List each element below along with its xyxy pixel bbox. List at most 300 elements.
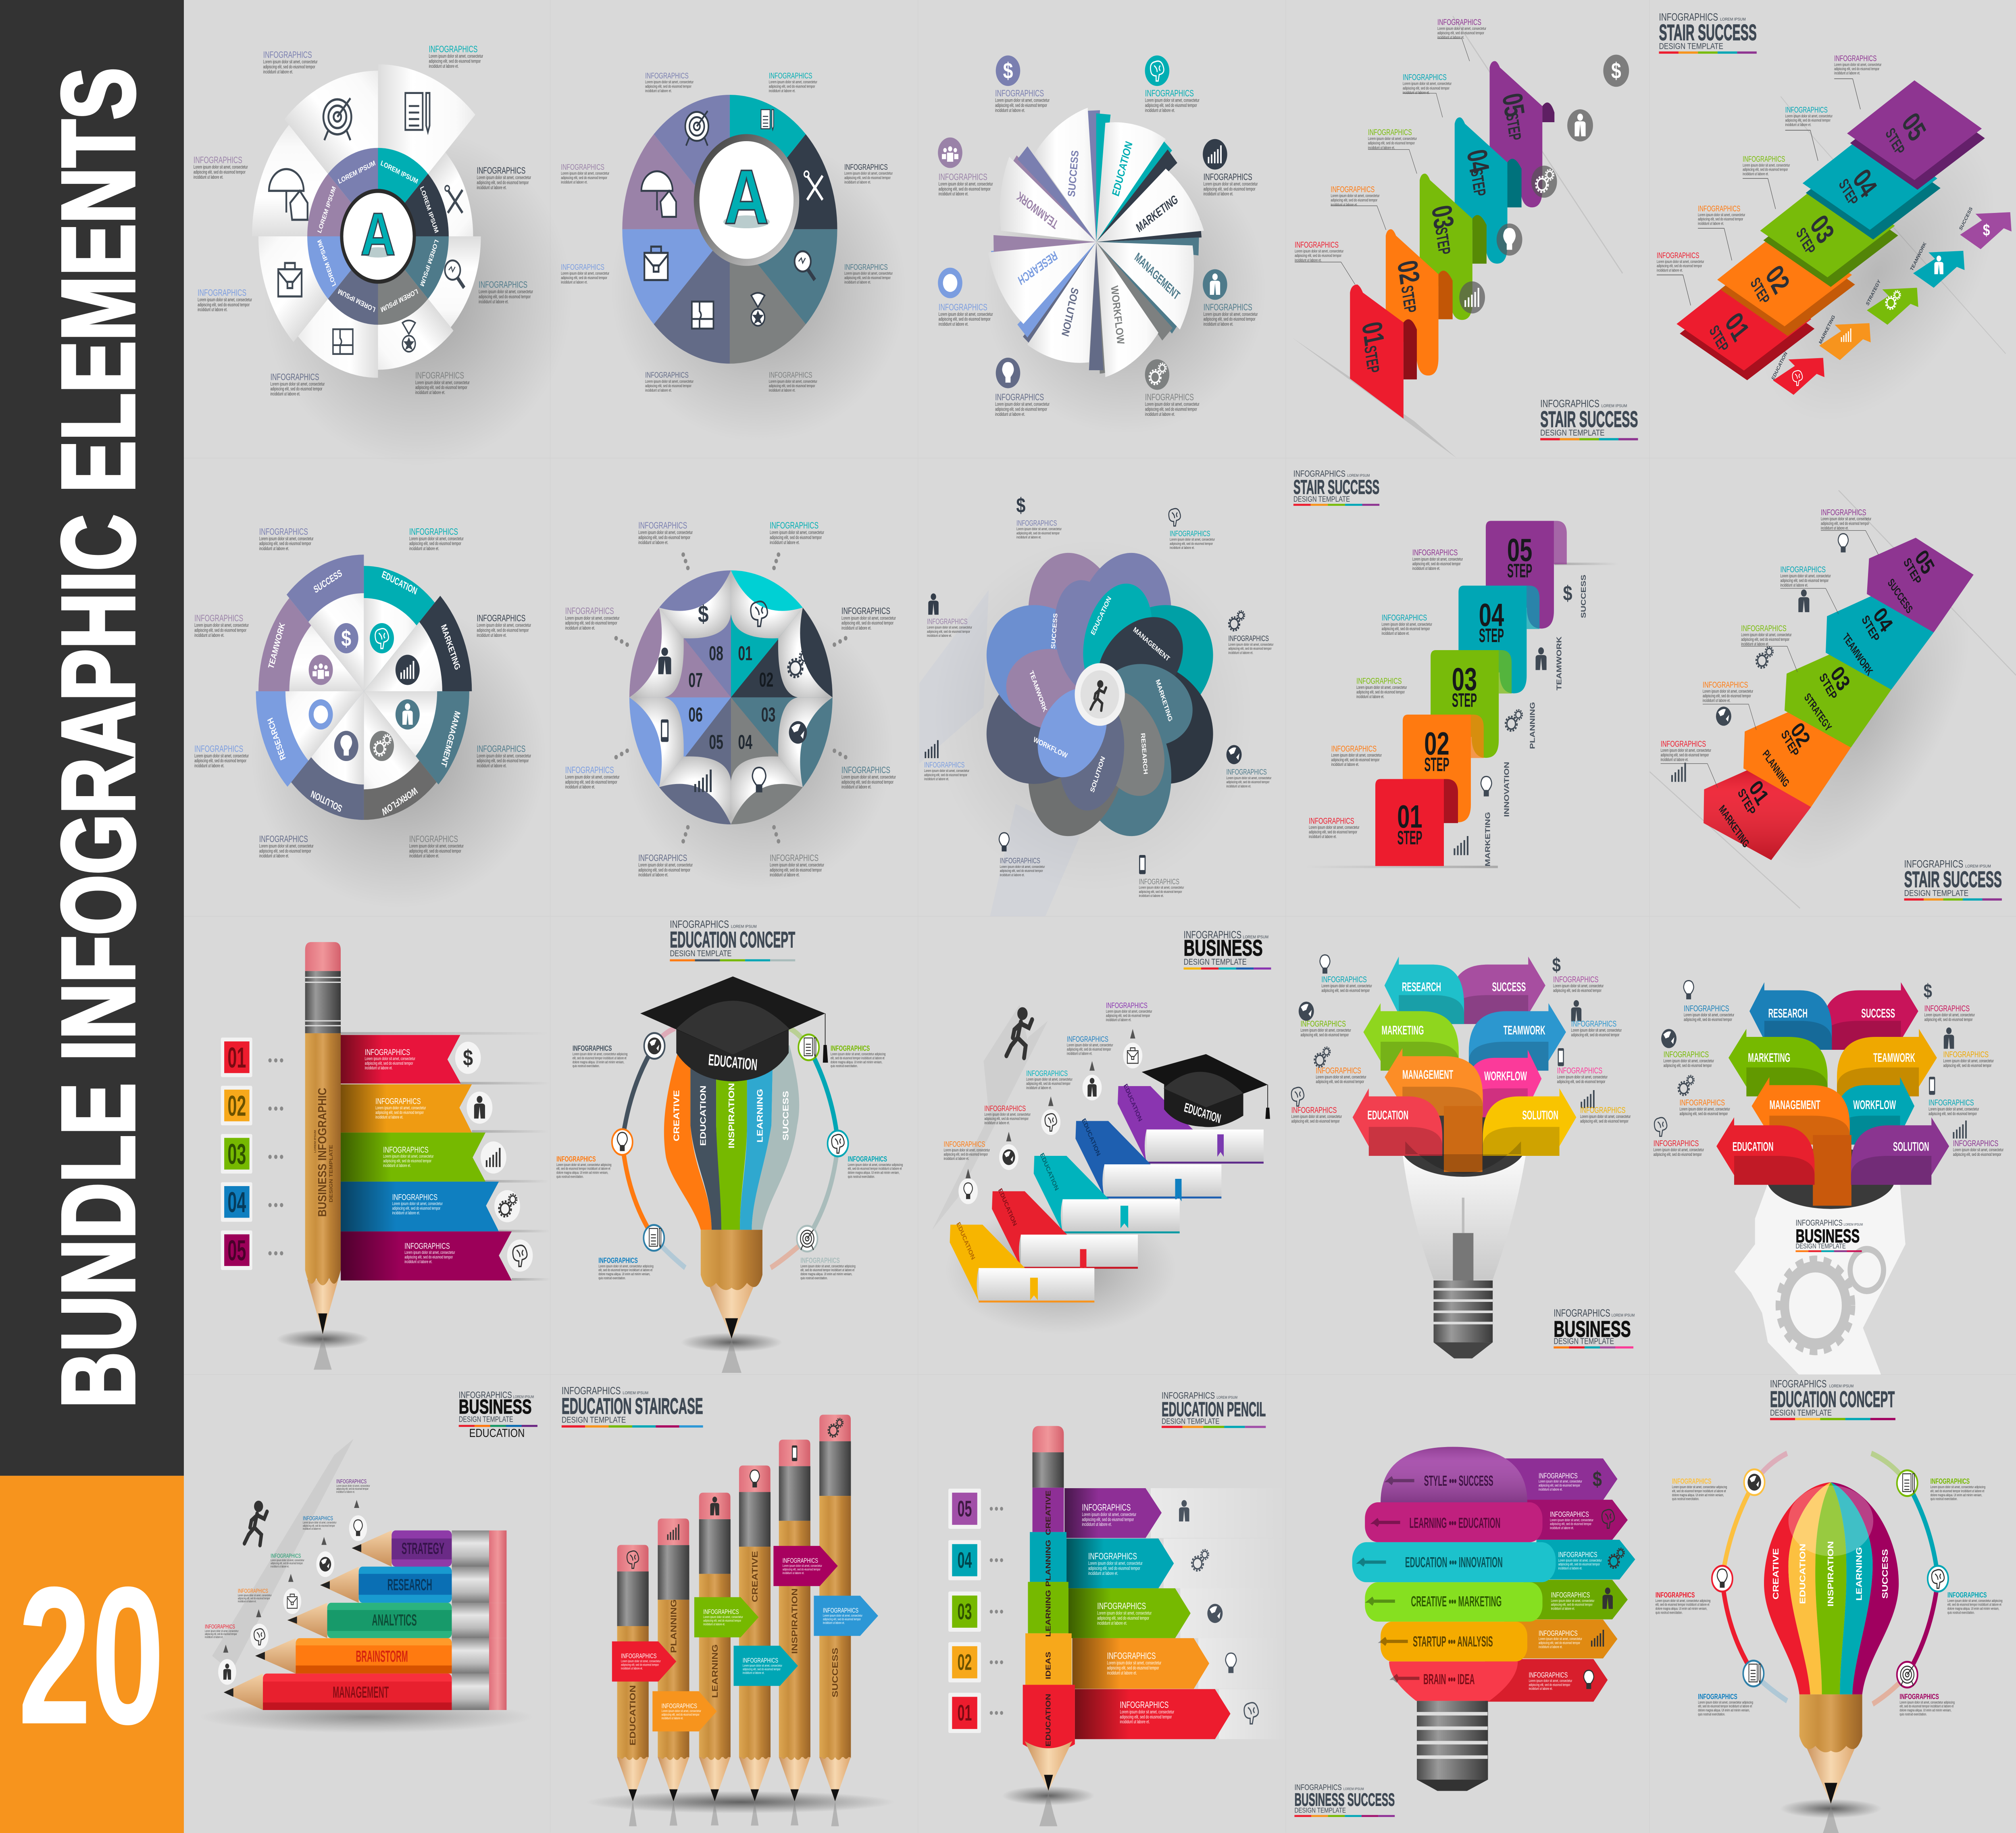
text block slate: adipiscing elit, sed do eiusmod tempor [995,407,1048,412]
fan labels: RESEARCH [1016,248,1059,287]
text block teal [1382,613,1432,636]
flag teal: INFOGRAPHICS [743,1657,778,1664]
text block orange: Lorem ipsum dolor sit amet, consectetur adipiscing [556,1163,612,1167]
heading: business education: LOREM IPSUM [513,1395,534,1399]
text block dark [844,162,893,184]
text block teal: Lorem ipsum dolor sit amet, consectetur [1170,537,1215,542]
text block green: Lorem ipsum dolor sit amet, consectetur adipiscing [1931,1485,1985,1489]
step numbers: 04 [1847,163,1883,204]
heading: education concept: EDUCATION CONCEPT [670,927,795,952]
heading: business education: DESIGN TEMPLATE [459,1415,513,1424]
banner text 1: adipiscing elit, sed do eiusmod tempor [365,1061,413,1066]
text block blue: incididunt ut labore et. [303,1528,321,1531]
text block slate: adipiscing elit, sed do eiusmod tempor [638,867,691,873]
tag text teal [1558,1551,1602,1570]
text block indigo: adipiscing elit, sed do eiusmod tempor [638,535,691,540]
text block orange: Lorem ipsum dolor sit amet, consectetur [944,1147,990,1152]
text block dark: incididunt ut labore et. [844,180,871,184]
text block blue [565,765,620,790]
text block steel: INFOGRAPHICS [477,744,525,754]
text block blue [1698,1693,1753,1716]
text block red: adipiscing elit, sed do eiusmod tempor [1291,1119,1340,1124]
text block purple: INFOGRAPHICS [939,172,987,182]
number tiles: 03 [958,1599,972,1624]
banner text green: adipiscing elit, sed do eiusmod tempor [1097,1616,1150,1621]
banners [341,1035,512,1280]
step numbers: STEP [1779,727,1801,759]
bundle count: 20 [18,1546,165,1765]
heading: stair success: STAIR SUCCESS [1659,20,1757,45]
text block teal: INFOGRAPHICS [1929,1097,1974,1107]
heading: stair success: DESIGN TEMPLATE [1540,428,1605,438]
text block indigo [259,527,314,552]
panel: ribbon wheel with icon discs [194,526,546,908]
swirl labels: WORKFLOW [1033,735,1068,760]
text block red: Lorem ipsum dolor sit amet, consectetur [1291,1114,1342,1119]
flag blue: incididunt ut labore et. [823,1621,845,1625]
head gears [1778,1249,1884,1352]
text block purple: INFOGRAPHICS [1437,17,1481,27]
text block teal: adipiscing elit, sed do eiusmod tempor [769,84,815,89]
flag green: Lorem ipsum dolor sit amet, consectetur [703,1615,743,1619]
text block red [1291,1105,1342,1124]
pencil creative [739,1466,771,1826]
text block teal: adipiscing elit, sed do eiusmod tempor [1929,1111,1977,1116]
text block dark [841,606,896,631]
text block indigo: adipiscing elit, sed do eiusmod tempor [645,84,691,89]
text block slate: incididunt ut labore et. [995,412,1025,417]
text block slate: dolore magna aliqua. Ut enim ad minim veniam, [573,1060,624,1064]
banner text green: Lorem ipsum dolor sit amet, consectetur [1097,1611,1152,1616]
text block red: INFOGRAPHICS [1654,1138,1699,1148]
heading: education pencil [1162,1391,1266,1428]
text block slate: Lorem ipsum dolor sit amet, consectetur [645,379,694,384]
panel: banded business bulb [1294,1447,1635,1817]
pencil education [617,1545,649,1826]
icons: $ [1552,955,1561,976]
tag text red: adipiscing elit, sed do eiusmod tempor [1529,1683,1570,1687]
text block indigo: adipiscing elit, sed do eiusmod tempor [1016,531,1060,535]
step numbers: STEP [1747,274,1773,308]
panel: pencil with banner steps [221,942,550,1370]
text block purple [194,613,249,638]
ring labels: LOREM IPSUM [337,159,376,186]
panel: pinwheel fan [938,56,1266,434]
head silhouette [1735,1174,1906,1374]
step numbers: STEP [1432,226,1454,256]
text block purple: Lorem ipsum dolor sit amet, consectetur [1106,1009,1152,1013]
text block amber: INFOGRAPHICS [1943,1049,1989,1059]
ring arcs [1722,1453,1938,1704]
banner text red [1120,1700,1175,1725]
text block green: Lorem ipsum dolor sit amet, consectetur [1664,1058,1714,1063]
text block grey [770,853,824,878]
pencil learning [699,1493,731,1825]
text block green: adipiscing elit, sed do eiusmod tempor [1741,637,1789,642]
text block blue: elit, sed do eiusmod tempor incididunt ut labore et [1698,1704,1752,1708]
text block green: adipiscing elit, sed do eiusmod tempor [1368,141,1415,146]
text block purple: INFOGRAPHICS [1106,1001,1148,1010]
banner text 1: incididunt ut labore et. [365,1066,393,1070]
panel: stacked sleeve pencil [948,1391,1286,1826]
heading: education pencil: DESIGN TEMPLATE [1162,1417,1220,1426]
flag orange: INFOGRAPHICS [662,1702,697,1710]
banner text green [1097,1601,1152,1626]
text block teal: INFOGRAPHICS [1780,564,1826,574]
text block green: INFOGRAPHICS [831,1045,870,1053]
heading: stair success [1904,858,2002,901]
banner text red: INFOGRAPHICS [1120,1700,1168,1710]
ring labels: LOREM IPSUM [419,185,439,234]
text block steel: Lorem ipsum dolor sit amet, consectetur [477,753,531,759]
text block grey: INFOGRAPHICS [415,371,464,381]
text block purple: INFOGRAPHICS [1412,547,1458,557]
text block steel: incididunt ut labore et. [1226,784,1251,788]
flag magenta: incididunt ut labore et. [783,1571,804,1575]
text block steel: adipiscing elit, sed do eiusmod tempor [1204,317,1256,322]
book purple [1118,1086,1264,1164]
heading: education concept: LOREM IPSUM [1829,1384,1854,1388]
text block indigo [995,88,1050,113]
banner text green: INFOGRAPHICS [1097,1601,1146,1612]
arrow labels [1367,980,1558,1122]
text block slate: INFOGRAPHICS [573,1045,612,1053]
text block blue: Lorem ipsum dolor sit amet, consectetur [565,775,620,780]
star numbers: 05 [709,731,723,753]
fan labels: MARKETING [1134,192,1180,235]
banner text 4: INFOGRAPHICS [392,1192,437,1202]
text block teal [848,1155,903,1179]
vertical captions [1484,575,1588,866]
white folded petals [629,570,833,824]
text block indigo: adipiscing elit, sed do eiusmod tempor [995,103,1048,108]
text block grey: adipiscing elit, sed do eiusmod tempor [1139,890,1182,894]
tag text amber: Lorem ipsum dolor sit amet, consectetur [1539,1637,1582,1641]
segment captions: CREATIVE [1044,1490,1052,1535]
banner text teal: adipiscing elit, sed do eiusmod tempor [1088,1566,1140,1571]
flag green: INFOGRAPHICS [703,1608,739,1616]
text block red: Lorem ipsum dolor sit amet, consectetur [1654,1147,1704,1152]
heading: business: INFOGRAPHICS [1554,1307,1610,1319]
tag text green: adipiscing elit, sed do eiusmod tempor [1551,1602,1593,1607]
center badge A: A [724,154,769,240]
tag text magenta: adipiscing elit, sed do eiusmod tempor [1550,1522,1591,1526]
text block indigo: incididunt ut labore et. [1016,535,1041,540]
text block blue: INFOGRAPHICS [198,288,246,298]
text block grey: INFOGRAPHICS [800,1257,840,1265]
text block orange: elit, sed do eiusmod tempor incididunt ut labore et [556,1166,610,1171]
banner text 2: incididunt ut labore et. [375,1115,403,1120]
text block red: INFOGRAPHICS [1309,816,1354,826]
text block teal: Lorem ipsum dolor sit amet, consectetur [1026,1077,1073,1082]
text block slate: Lorem ipsum dolor sit amet, consectetur [1000,865,1045,869]
text block teal: Lorem ipsum dolor sit amet, consectetur adipiscing [1947,1599,2002,1603]
text block blue [561,262,609,284]
text block grey: INFOGRAPHICS [409,834,458,845]
text block red: adipiscing elit, sed do eiusmod tempor [1654,1152,1702,1157]
text block red: incididunt ut labore et. [205,1636,223,1639]
text block yellow: adipiscing elit, sed do eiusmod tempor [1580,1119,1629,1124]
text block yellow: Lorem ipsum dolor sit amet, consectetur adipiscing [1672,1485,1727,1489]
text block red: INFOGRAPHICS [205,1623,235,1630]
text block grey: incididunt ut labore et. [769,388,796,392]
spine labels: EDUCATION [1081,1117,1102,1157]
text block purple: Lorem ipsum dolor sit amet, consectetur [939,182,993,187]
banner text teal: incididunt ut labore et. [1088,1571,1118,1576]
text block blue [939,302,993,327]
text block blue: Lorem ipsum dolor sit amet, consectetur [194,753,249,759]
text block orange: incididunt ut labore et. [1331,762,1359,767]
text block orange: Lorem ipsum dolor sit amet, consectetur [1316,1075,1366,1080]
tag text red [1529,1671,1572,1691]
step numbers [1706,106,1931,356]
text block indigo: INFOGRAPHICS [259,527,308,537]
text block purple: adipiscing elit, sed do eiusmod tempor [565,621,617,626]
text block green: INFOGRAPHICS [271,1553,301,1559]
text block pink [1557,1066,1608,1084]
text block blue: INFOGRAPHICS [939,302,987,313]
fan labels: MANAGEMENT [1133,250,1182,303]
arrow captions [1770,206,1974,381]
spine labels: EDUCATION [1122,1083,1143,1123]
text block steel [479,280,533,304]
star numbers: 04 [738,731,753,753]
text block steel: incididunt ut labore et. [477,763,507,769]
text block teal: INFOGRAPHICS [1382,613,1427,622]
tag text magenta: INFOGRAPHICS [1550,1511,1589,1519]
text block teal: INFOGRAPHICS [1170,530,1210,538]
text block slate [995,392,1050,417]
text block grey: adipiscing elit, sed do eiusmod tempor [415,385,467,390]
ring labels: LOREM IPSUM [380,287,419,313]
text block red [1654,1138,1704,1157]
text block purple: INFOGRAPHICS [1953,1138,1998,1148]
text block orange: adipiscing elit, sed do eiusmod tempor [1703,694,1751,698]
text block blue: dolore magna aliqua. Ut enim ad minim veniam, [1698,1708,1750,1712]
text block green [1300,1019,1351,1037]
banner text purple: Lorem ipsum dolor sit amet, consectetur [1082,1512,1137,1517]
text block slate [1000,857,1045,877]
text block green: INFOGRAPHICS [1741,623,1787,633]
banner text 5: adipiscing elit, sed do eiusmod tempor [404,1255,453,1260]
panel: bulb with arrows [1291,955,1635,1358]
icons [1671,534,1848,782]
heading: business [1184,929,1271,970]
heading: business: INFOGRAPHICS [1184,929,1241,940]
text block blue: INFOGRAPHICS [303,1515,333,1522]
star numbers: 01 [738,642,752,665]
text block magenta: Lorem ipsum dolor sit amet, consectetur adipiscing [1899,1700,1955,1704]
text block steel: Lorem ipsum dolor sit amet, consectetur [844,271,893,275]
flag green: incididunt ut labore et. [703,1622,725,1626]
arrow labels: TEAMWORK [1873,1051,1915,1065]
text block indigo: INFOGRAPHICS [638,521,687,531]
text block teal [1026,1069,1073,1090]
segment captions [1044,1490,1052,1747]
heading: business success: DESIGN TEMPLATE [1294,1807,1346,1814]
text block dark: adipiscing elit, sed do eiusmod tempor [844,175,891,180]
vertical captions: TEAMWORK [1556,636,1563,690]
vertical captions: INNOVATION [1503,762,1511,817]
banner discs with icons [455,1042,533,1272]
text block green: incididunt ut labore et. [271,1566,289,1568]
text block dark [1229,634,1274,655]
heading: stair success: DESIGN TEMPLATE [1293,494,1350,503]
ring labels: LOREM IPSUM [317,238,337,287]
text block teal: Lorem ipsum dolor sit amet, consectetur [1321,984,1372,988]
text block red: INFOGRAPHICS [984,1104,1026,1113]
tag text green: incididunt ut labore et. [1551,1606,1575,1611]
text block blue: incididunt ut labore et. [561,279,587,284]
text block grey [409,834,464,859]
heading: business: DESIGN TEMPLATE [1184,957,1247,967]
arrow icons: $ [1983,221,1990,239]
text block blue [598,1257,654,1280]
text block indigo: incididunt ut labore et. [638,540,668,545]
step numbers: STEP [1360,344,1383,375]
step numbers: 05 [1896,106,1931,147]
text block crimson: adipiscing elit, sed do eiusmod tempor [1924,1017,1972,1022]
heading: stair success: INFOGRAPHICS [1540,398,1599,409]
text block purple: adipiscing elit, sed do eiusmod tempor [927,630,970,634]
arrow labels: MARKETING [1748,1051,1790,1065]
center badge A: A [360,200,396,268]
banner text red: Lorem ipsum dolor sit amet, consectetur [1120,1710,1175,1715]
flag blue [814,1596,878,1636]
tag icons [1584,1468,1624,1688]
text block orange [1703,680,1753,703]
arrow labels: SOLUTION [1522,1108,1558,1122]
text block slate [645,370,694,392]
text block grey: adipiscing elit, sed do eiusmod tempor [1145,407,1197,412]
bulb glass [1402,1145,1527,1358]
tag text purple [1539,1472,1582,1491]
step numbers: STEP [1502,112,1524,142]
fan labels: EDUCATION [1110,140,1135,198]
text block dark: incididunt ut labore et. [477,633,507,638]
text block red: Lorem ipsum dolor sit amet, consectetur [984,1112,1031,1117]
text block orange [1679,1097,1730,1116]
text block purple: adipiscing elit, sed do eiusmod tempor [939,187,991,192]
text block slate: Lorem ipsum dolor sit amet, consectetur [259,844,314,849]
inner swirl petals [1004,571,1198,817]
text block blue: adipiscing elit, sed do eiusmod tempor [565,780,617,785]
flag orange [652,1691,717,1731]
pencil captions: INSPIRATION [790,1588,799,1654]
fan labels: WORKFLOW [1108,285,1126,346]
banner text red: adipiscing elit, sed do eiusmod tempor [1120,1714,1172,1720]
text block red: INFOGRAPHICS [1295,240,1339,250]
text block blue: INFOGRAPHICS [924,761,964,769]
text block blue: adipiscing elit, sed do eiusmod tempor [198,302,250,308]
graduation cap [640,976,828,1081]
number tiles: 02 [227,1090,246,1122]
text block red [1309,816,1359,839]
text block blue: Lorem ipsum dolor sit amet, consectetur adipiscing [1698,1700,1753,1704]
text block teal: quis nostrud exercitation. [848,1174,875,1179]
text block teal [1785,105,1833,127]
text block steel: INFOGRAPHICS [1204,302,1252,313]
heading: education staircase: LOREM IPSUM [623,1391,648,1395]
banner text teal [1088,1551,1143,1576]
text block teal: INFOGRAPHICS [1145,88,1194,99]
text block blue: INFOGRAPHICS [1684,1003,1729,1013]
text block teal: incididunt ut labore et. [409,546,439,552]
text block indigo: INFOGRAPHICS [645,71,689,80]
text block slate: Lorem ipsum dolor sit amet, consectetur adipiscing [573,1052,627,1056]
banner text 5: INFOGRAPHICS [404,1241,450,1251]
text block crimson [1924,1003,1975,1022]
text block steel: Lorem ipsum dolor sit amet, consectetur [1204,312,1258,317]
text block purple: INFOGRAPHICS [336,1478,367,1485]
tag text amber: incididunt ut labore et. [1539,1645,1562,1649]
text block purple: incididunt ut labore et. [1834,71,1860,75]
text block dark: INFOGRAPHICS [1229,634,1269,643]
text block blue: Lorem ipsum dolor sit amet, consectetur [924,769,969,773]
text block teal: INFOGRAPHICS [1026,1069,1068,1078]
connector dots [614,553,848,844]
text block dark: INFOGRAPHICS [477,166,525,176]
star numbers: 08 [709,642,723,665]
text block slate: incididunt ut labore et. [1000,873,1025,877]
arrow labels: MANAGEMENT [1402,1068,1453,1082]
tag text red: incididunt ut labore et. [1529,1687,1553,1691]
text block red: adipiscing elit, sed do eiusmod tempor [1309,830,1357,834]
text block purple: adipiscing elit, sed do eiusmod tempor [336,1488,369,1491]
heading: business: BUSINESS [1554,1316,1631,1342]
text block orange: INFOGRAPHICS [1331,744,1377,753]
step numbers: STEP [1735,786,1758,818]
heading: business success: BUSINESS SUCCESS [1294,1789,1395,1810]
pencil analytics: ANALYTICS [372,1611,417,1629]
heading: stair success [1540,398,1638,440]
arrow icons [1792,221,1990,386]
text block red: dolore magna aliqua. Ut enim ad minim veniam, [1656,1606,1707,1611]
stripe labels: SUCCESS [781,1091,790,1141]
text block red: Lorem ipsum dolor sit amet, consectetur [1309,825,1359,830]
text block orange: INFOGRAPHICS [1679,1097,1725,1107]
text block blue: Lorem ipsum dolor sit amet, consectetur adipiscing [598,1264,654,1268]
text block green: INFOGRAPHICS [1368,127,1412,137]
star numbers: 03 [761,703,775,726]
panel: isometric stair ribbons [1657,11,2016,478]
panel: zigzag folded stairs [1649,490,2016,916]
text block green: quis nostrud exercitation. [1931,1497,1958,1501]
text block dark: INFOGRAPHICS [844,162,888,172]
heading: education staircase: INFOGRAPHICS [562,1385,621,1396]
swirl labels: SOLUTION [1089,755,1106,794]
text block purple [565,606,620,631]
text block red: adipiscing elit, sed do eiusmod tempor [1295,253,1341,258]
text block orange: quis nostrud exercitation. [556,1174,583,1179]
swirl labels: TEAMWORK [1028,669,1048,713]
text block red: Lorem ipsum dolor sit amet, consectetur [205,1630,238,1633]
text block grey: dolore magna aliqua. Ut enim ad minim veniam, [800,1272,852,1276]
text block orange: adipiscing elit, sed do eiusmod tempor [1698,217,1743,221]
text block dark: Lorem ipsum dolor sit amet, consectetur [1229,642,1274,646]
text block grey: INFOGRAPHICS [1139,878,1179,886]
text block grey: incididunt ut labore et. [409,854,439,859]
bands [1352,1447,1556,1701]
book red [992,1191,1138,1272]
text block yellow: INFOGRAPHICS [1580,1105,1625,1115]
text block purple: adipiscing elit, sed do eiusmod tempor [1412,561,1461,566]
text block green: INFOGRAPHICS [1931,1478,1970,1486]
pencil analytics [287,1603,506,1638]
banner text 1: Lorem ipsum dolor sit amet, consectetur [365,1056,415,1061]
text block slate: INFOGRAPHICS [638,853,687,863]
text block indigo: Lorem ipsum dolor sit amet, consectetur [638,530,693,536]
